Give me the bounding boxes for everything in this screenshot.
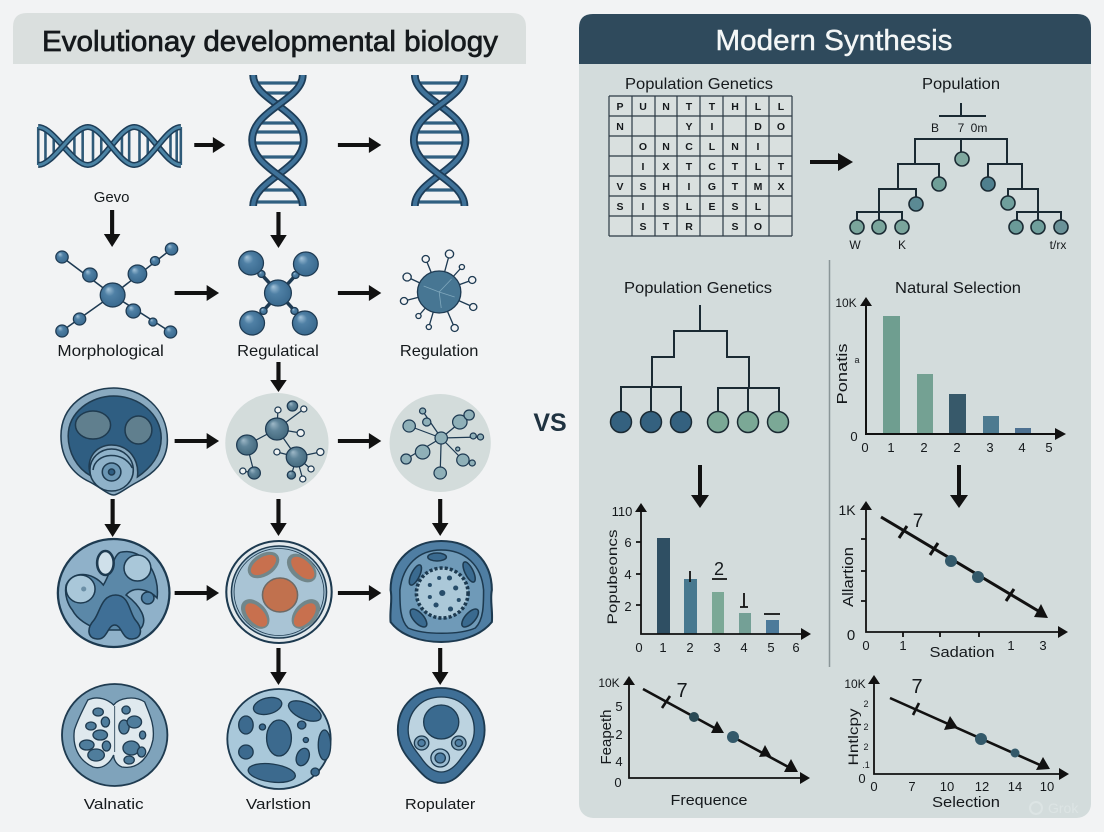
line chart: selection: 2 — [863, 722, 869, 732]
letter grid: C — [685, 141, 693, 153]
icon: vertical DNA right — [414, 75, 466, 206]
left panel diagram — [38, 75, 492, 813]
population tree: B — [931, 121, 939, 135]
arrow — [175, 433, 219, 449]
letter grid: T — [778, 161, 785, 173]
bar chart: population genetics: 2 — [714, 559, 724, 579]
heading: Population Genetics tree: Population Genetics — [624, 280, 772, 297]
arrow — [104, 210, 120, 247]
line chart: sadation: 1K — [838, 502, 856, 518]
letter grid: T — [686, 161, 693, 173]
title: Evolutionary developmental biology: Evolutionay developmental biology — [42, 26, 499, 58]
population tree: W — [849, 238, 861, 252]
line chart: sadation: 0 — [847, 627, 855, 644]
letter grid: E — [708, 201, 716, 213]
letter grid: R — [685, 221, 693, 233]
bar chart: population genetics: 1 — [659, 640, 667, 655]
line chart: sadation: 1 — [899, 638, 907, 653]
label: Morphological: Morphological — [57, 342, 164, 360]
line chart: frequence: 4 — [615, 754, 623, 769]
line chart: selection: .1 — [862, 760, 870, 770]
bar chart: natural selection — [834, 296, 1066, 455]
line chart: selection: 2 — [863, 699, 869, 709]
letter grid: L — [755, 101, 762, 113]
line chart: selection: 10K — [844, 677, 866, 691]
letter grid: G — [708, 181, 716, 193]
arrow — [194, 137, 225, 153]
line chart: frequence: 2 — [615, 727, 623, 742]
icon: vertical DNA middle — [252, 75, 304, 206]
population tree: 7 — [958, 121, 965, 135]
letter grid: D — [754, 121, 762, 133]
line chart: sadation: 3 — [1039, 638, 1047, 653]
bar chart: natural selection: 1 — [887, 440, 895, 455]
letter grid: S — [731, 201, 739, 213]
letter grid: O — [754, 221, 762, 233]
letter grid: N — [731, 141, 739, 153]
label: Ropulater: Ropulater — [405, 796, 475, 813]
bar chart: population genetics: Popubeoncs — [604, 530, 620, 624]
bar chart: natural selection: a — [854, 355, 860, 365]
arrow — [338, 585, 381, 601]
bar chart: population genetics: 6 — [792, 640, 800, 655]
letter grid: O — [639, 141, 647, 153]
letter grid: X — [777, 181, 785, 193]
arrow — [338, 137, 381, 153]
letter grid: T — [732, 181, 739, 193]
bar chart: population genetics: 2 — [624, 599, 632, 614]
icon: cell with lobes — [58, 539, 169, 647]
line chart: selection: 12 — [975, 779, 989, 794]
bar chart: population genetics: 5 — [767, 640, 775, 655]
label: Gevo: Gevo — [94, 190, 129, 206]
bar chart: natural selection: 5 — [1045, 440, 1053, 455]
label: Regulatical: Regulatical — [237, 342, 319, 360]
arrow — [270, 499, 287, 536]
line chart: frequence: 5 — [615, 699, 623, 714]
letter grid: S — [662, 201, 670, 213]
line chart: frequence — [598, 676, 810, 809]
line chart: frequence: 10K — [598, 676, 620, 690]
label: Varlstion: Varlstion — [246, 796, 311, 813]
letter grid: Y — [685, 121, 693, 133]
line chart: selection — [844, 675, 1069, 811]
VS label: VS — [533, 409, 567, 437]
letter grid: T — [732, 161, 739, 173]
arrow — [175, 285, 219, 301]
letter grid: O — [777, 121, 785, 133]
icon: teardrop cell — [398, 688, 485, 783]
arrow — [270, 362, 287, 392]
label: Regulation: Regulation — [400, 342, 478, 360]
line chart: selection: Selection — [932, 794, 1000, 811]
letter grid: N — [662, 141, 670, 153]
arrow — [338, 433, 381, 449]
icon: star network in circle — [390, 394, 491, 492]
title: Modern Synthesis: Modern Synthesis — [716, 25, 952, 57]
divider — [828, 260, 830, 667]
letter grid: S — [731, 221, 739, 233]
genetics tree — [610, 305, 788, 432]
icon: molecule network in circle — [225, 393, 329, 493]
bar chart: population genetics: 0 — [635, 640, 643, 655]
arrow — [175, 585, 219, 601]
letter grid: P — [616, 101, 624, 113]
right panel: Modern Synthesis — [579, 14, 1091, 818]
line chart: sadation: 0 — [862, 638, 870, 653]
letter grid: S — [616, 201, 624, 213]
arrow — [950, 465, 968, 508]
arrow — [432, 499, 448, 536]
letter grid: H — [731, 101, 739, 113]
line chart: frequence: 7 — [676, 680, 688, 702]
icon: molecule morphological — [56, 243, 178, 338]
label: Valnatic: Valnatic — [84, 796, 144, 813]
letter grid: T — [686, 101, 693, 113]
line chart: selection: 10 — [940, 779, 954, 794]
population tree — [849, 103, 1068, 252]
arrow — [270, 212, 287, 248]
bar chart: population genetics: 4 — [740, 640, 748, 655]
letter grid: L — [709, 141, 716, 153]
letter grid: I — [642, 161, 645, 173]
letter grid: I — [711, 121, 714, 133]
icon: cell with dark organelles — [227, 689, 331, 789]
bar chart: natural selection: 2 — [953, 440, 961, 455]
icon: molecule regulatical — [239, 251, 318, 335]
bar chart: population genetics: 110 — [612, 504, 632, 519]
letter grid: S — [639, 221, 647, 233]
arrow — [338, 285, 381, 301]
letter grid: V — [616, 181, 624, 193]
icon: embryo cell — [61, 388, 167, 495]
letter grid: T — [663, 221, 670, 233]
left header band — [13, 13, 526, 64]
line chart: selection: 0 — [858, 771, 866, 786]
letter grid: C — [708, 161, 716, 173]
letter grid: L — [778, 101, 785, 113]
letter grid: X — [662, 161, 670, 173]
bar chart: natural selection: Ponatis — [834, 344, 851, 404]
icon: regulation cell — [400, 250, 477, 332]
bar chart: population genetics: 4 — [624, 567, 632, 582]
letter grid: L — [755, 161, 762, 173]
arrow — [691, 465, 709, 508]
letter grid: N — [662, 101, 670, 113]
heading: Natural Selection: Natural Selection — [895, 280, 1021, 297]
line chart: sadation: 1 — [1007, 638, 1015, 653]
arrow — [104, 499, 121, 537]
letter grid: I — [757, 141, 760, 153]
line chart: sadation — [838, 501, 1068, 661]
letter grid: T — [709, 101, 716, 113]
line chart: frequence: Feapeth — [598, 710, 615, 764]
arrow — [432, 648, 448, 685]
letter grid: M — [754, 181, 763, 193]
bar chart: population genetics — [604, 503, 811, 655]
letter grid: L — [686, 201, 693, 213]
letter grid: H — [662, 181, 670, 193]
letter grid: L — [755, 201, 762, 213]
icon: cell with orange organelles — [226, 541, 332, 643]
bar chart: population genetics: 6 — [624, 535, 632, 550]
line chart: selection: Hntlcpy — [845, 709, 861, 765]
letter grid: I — [688, 181, 691, 193]
letter grid: N — [616, 121, 624, 133]
population tree: t/rx — [1050, 238, 1066, 252]
line chart: sadation: 7 — [913, 511, 923, 532]
right header band — [579, 14, 1091, 64]
population tree: 0m — [971, 121, 987, 135]
arrow — [270, 648, 287, 685]
bar chart: population genetics: 2 — [686, 640, 694, 655]
population tree: K — [898, 238, 906, 252]
line chart: sadation: Sadation — [930, 644, 994, 661]
bar chart: natural selection: 0 — [861, 440, 869, 455]
line chart: sadation: Allartion — [840, 547, 857, 607]
bar chart: natural selection: 10K — [835, 296, 857, 310]
letter grid: I — [642, 201, 645, 213]
letter grid — [609, 96, 792, 236]
line chart: selection: 10 — [1040, 779, 1054, 794]
line chart: frequence: Frequence — [670, 792, 748, 809]
bar chart: population genetics: 3 — [713, 640, 721, 655]
letter grid: S — [639, 181, 647, 193]
line chart: selection: 2 — [863, 742, 869, 752]
line chart: selection: 14 — [1008, 779, 1022, 794]
line chart: selection: 0 — [870, 779, 878, 794]
arrow — [810, 153, 853, 171]
icon: rounded cell with nucleus — [390, 541, 492, 642]
heading: Population Genetics grid: Population Genetics — [625, 76, 773, 93]
icon: symmetric lobed cell — [62, 684, 167, 786]
line chart: selection: 7 — [908, 779, 916, 794]
line chart: frequence: 0 — [614, 775, 622, 790]
watermark: Grok — [1048, 800, 1079, 816]
bar chart: natural selection: 2 — [920, 440, 928, 455]
letter grid: U — [639, 101, 647, 113]
icon: horizontal DNA — [38, 127, 181, 165]
line chart: selection: 7 — [911, 676, 923, 698]
heading: Population: Population — [922, 76, 1000, 93]
watermark — [1030, 800, 1079, 816]
bar chart: natural selection: 3 — [986, 440, 994, 455]
bar chart: natural selection: 0 — [850, 429, 858, 444]
bar chart: natural selection: 4 — [1018, 440, 1026, 455]
